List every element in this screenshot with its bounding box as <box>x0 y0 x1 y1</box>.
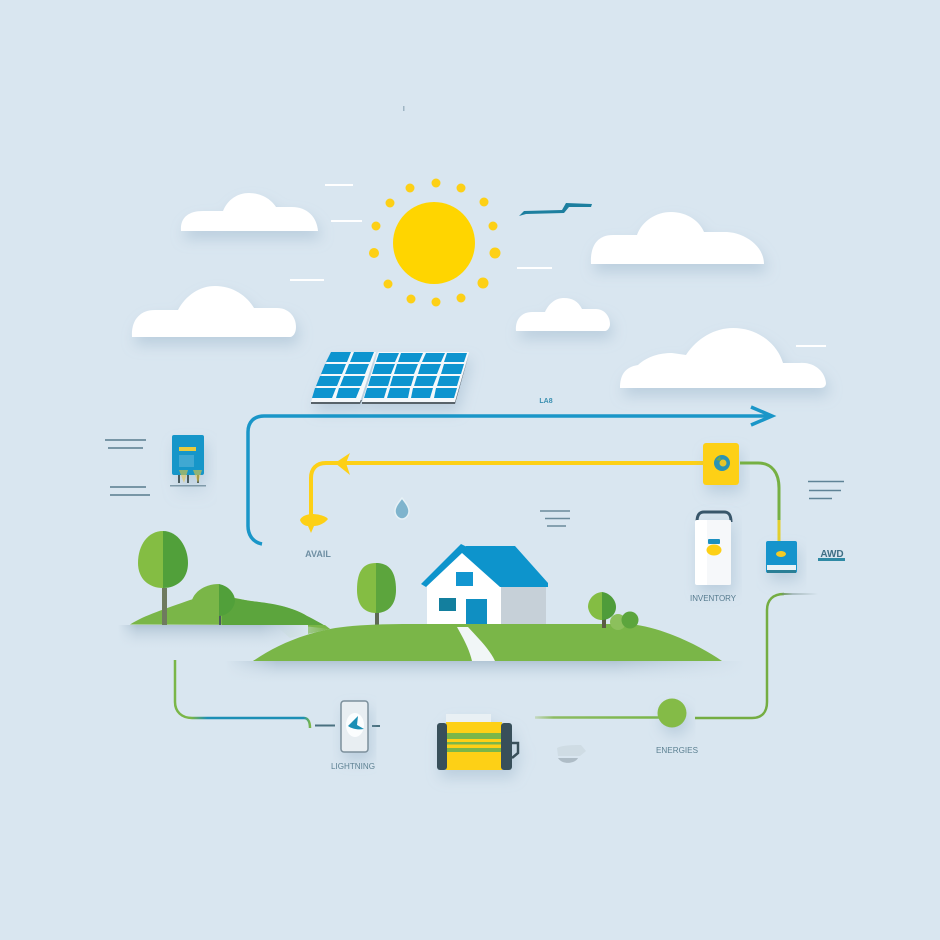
cable fade <box>782 593 818 595</box>
home battery <box>695 512 731 585</box>
connector dashes <box>315 724 380 727</box>
text lines: right <box>808 482 844 498</box>
sun <box>369 178 500 306</box>
label: phone: LIGHTNING <box>331 762 375 771</box>
bird glyph <box>519 203 592 216</box>
label: plug: AVAIL <box>305 549 331 559</box>
label: meter: AWD <box>820 549 844 560</box>
battery pack <box>437 714 518 770</box>
cloud 2 <box>591 212 764 264</box>
yellow cable segment <box>778 520 780 541</box>
cloud 1 <box>181 193 318 231</box>
shadow under left hill <box>118 625 308 651</box>
ground hill <box>253 624 722 661</box>
tree left small <box>191 584 235 625</box>
wind dashes <box>290 185 826 346</box>
tree left large <box>138 531 188 625</box>
green cable to blue box <box>740 463 779 520</box>
yellow flow arrow <box>300 453 704 533</box>
right lower cable <box>535 716 660 719</box>
shadow under ground <box>225 661 745 685</box>
smartphone <box>341 701 368 752</box>
panel right <box>362 352 469 404</box>
text lines: left <box>105 440 150 495</box>
inverter box <box>703 443 739 485</box>
blue meter box <box>766 541 797 573</box>
house <box>421 544 548 627</box>
label: battery: INVENTORY <box>690 594 737 603</box>
tiny mark <box>403 106 404 111</box>
cloud 4 <box>516 298 610 331</box>
path <box>457 627 495 661</box>
tree right <box>588 592 616 628</box>
control unit <box>170 435 206 486</box>
icon: plug <box>300 514 328 533</box>
solar panels <box>311 352 469 404</box>
text lines: center <box>540 511 570 526</box>
cloud 5 <box>620 328 826 388</box>
label: top: LA8 <box>539 398 553 405</box>
icon: swap arrow <box>557 745 586 763</box>
tree centre <box>357 563 396 627</box>
panel left <box>311 352 376 404</box>
left lower cable <box>175 660 310 728</box>
left hill <box>130 596 330 638</box>
cloud 3 <box>132 286 296 337</box>
blue flow arrow <box>248 407 772 544</box>
label: node: ENERGIES <box>656 746 698 755</box>
green node <box>658 698 686 728</box>
bush <box>610 612 638 630</box>
icon: water drop <box>395 498 409 519</box>
